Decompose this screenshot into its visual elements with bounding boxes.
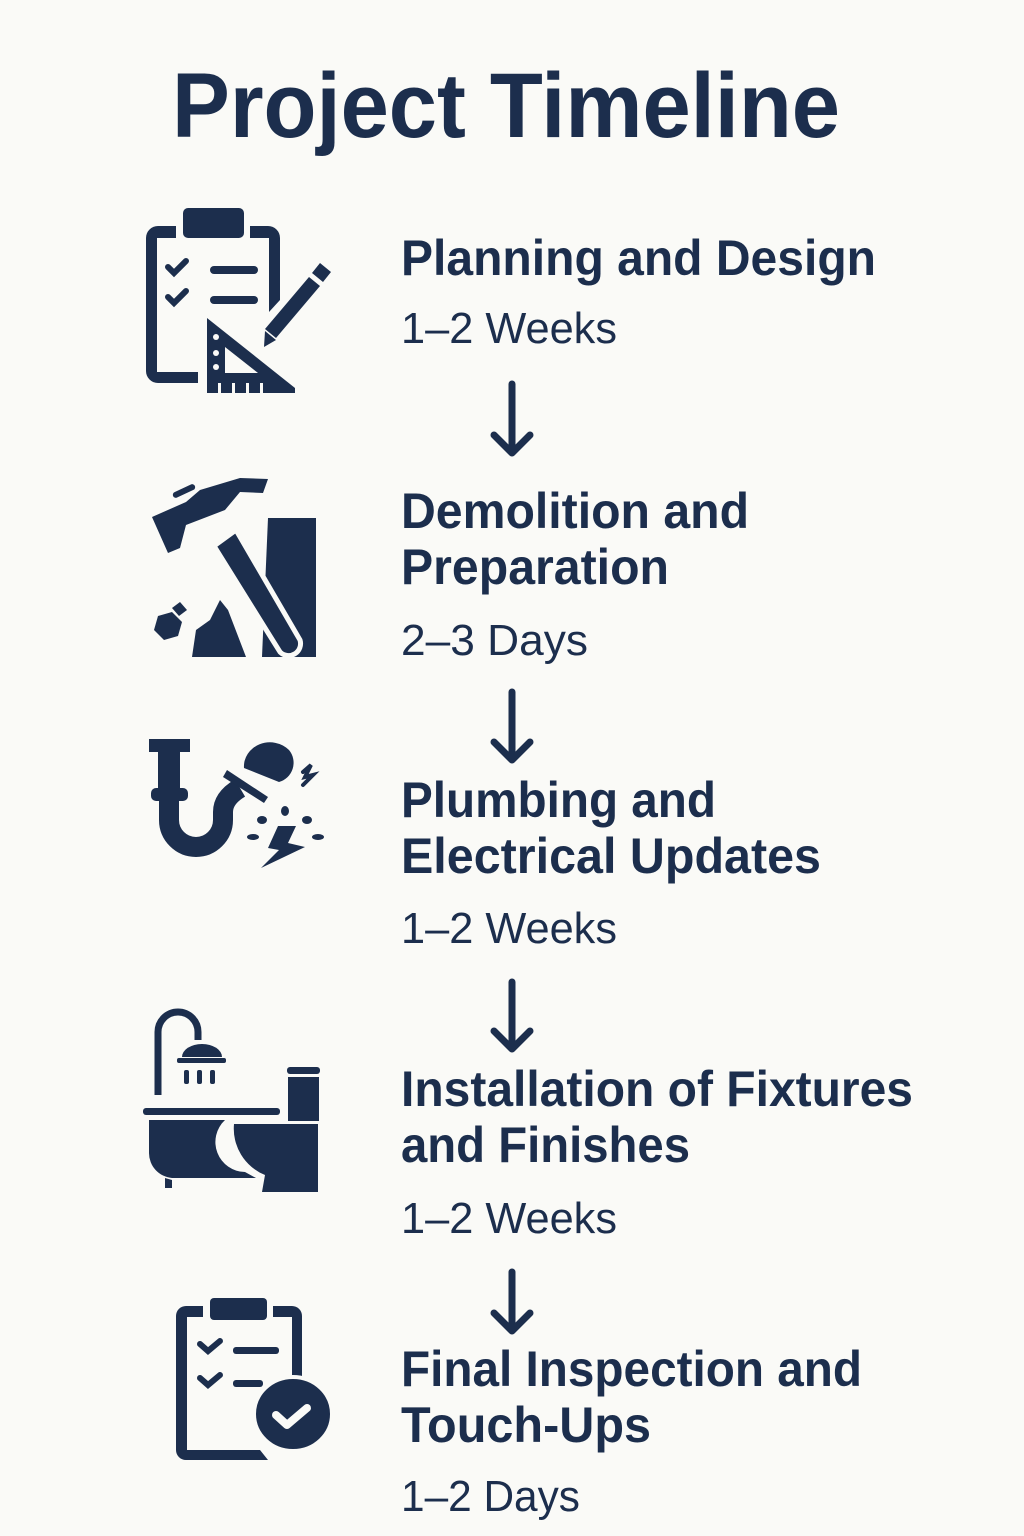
duration: demolition: 2–3 Days	[401, 616, 588, 665]
arrow 3	[494, 982, 530, 1049]
text: Touch-Ups	[401, 1397, 651, 1453]
heading: demolition: Demolition and	[401, 483, 749, 539]
text: and Finishes	[401, 1117, 690, 1173]
duration: planning: 1–2 Weeks	[401, 304, 617, 353]
heading: final inspection: Final Inspection and	[401, 1341, 862, 1397]
duration: plumbing: 1–2 Weeks	[401, 904, 617, 953]
icon: clipboard with check	[176, 1298, 332, 1460]
text: Electrical Updates	[401, 828, 821, 884]
heading: plumbing: Plumbing and	[401, 772, 716, 828]
arrow 1	[494, 384, 530, 453]
heading: installation: Installation of Fixtures	[401, 1061, 913, 1117]
heading: planning: Planning and Design	[401, 230, 876, 286]
title: Project Timeline	[172, 55, 840, 157]
text: Preparation	[401, 539, 669, 595]
arrow 4	[494, 1272, 530, 1331]
duration: final inspection: 1–2 Days	[401, 1472, 580, 1521]
duration: installation: 1–2 Weeks	[401, 1194, 617, 1243]
arrow 2	[494, 692, 530, 760]
icon: clipboard with ruler and pencil	[146, 208, 331, 393]
icon: plumbing and electrical	[149, 739, 324, 868]
icon: hammer and wall	[152, 478, 316, 657]
icon: bathtub and toilet	[143, 1012, 320, 1192]
